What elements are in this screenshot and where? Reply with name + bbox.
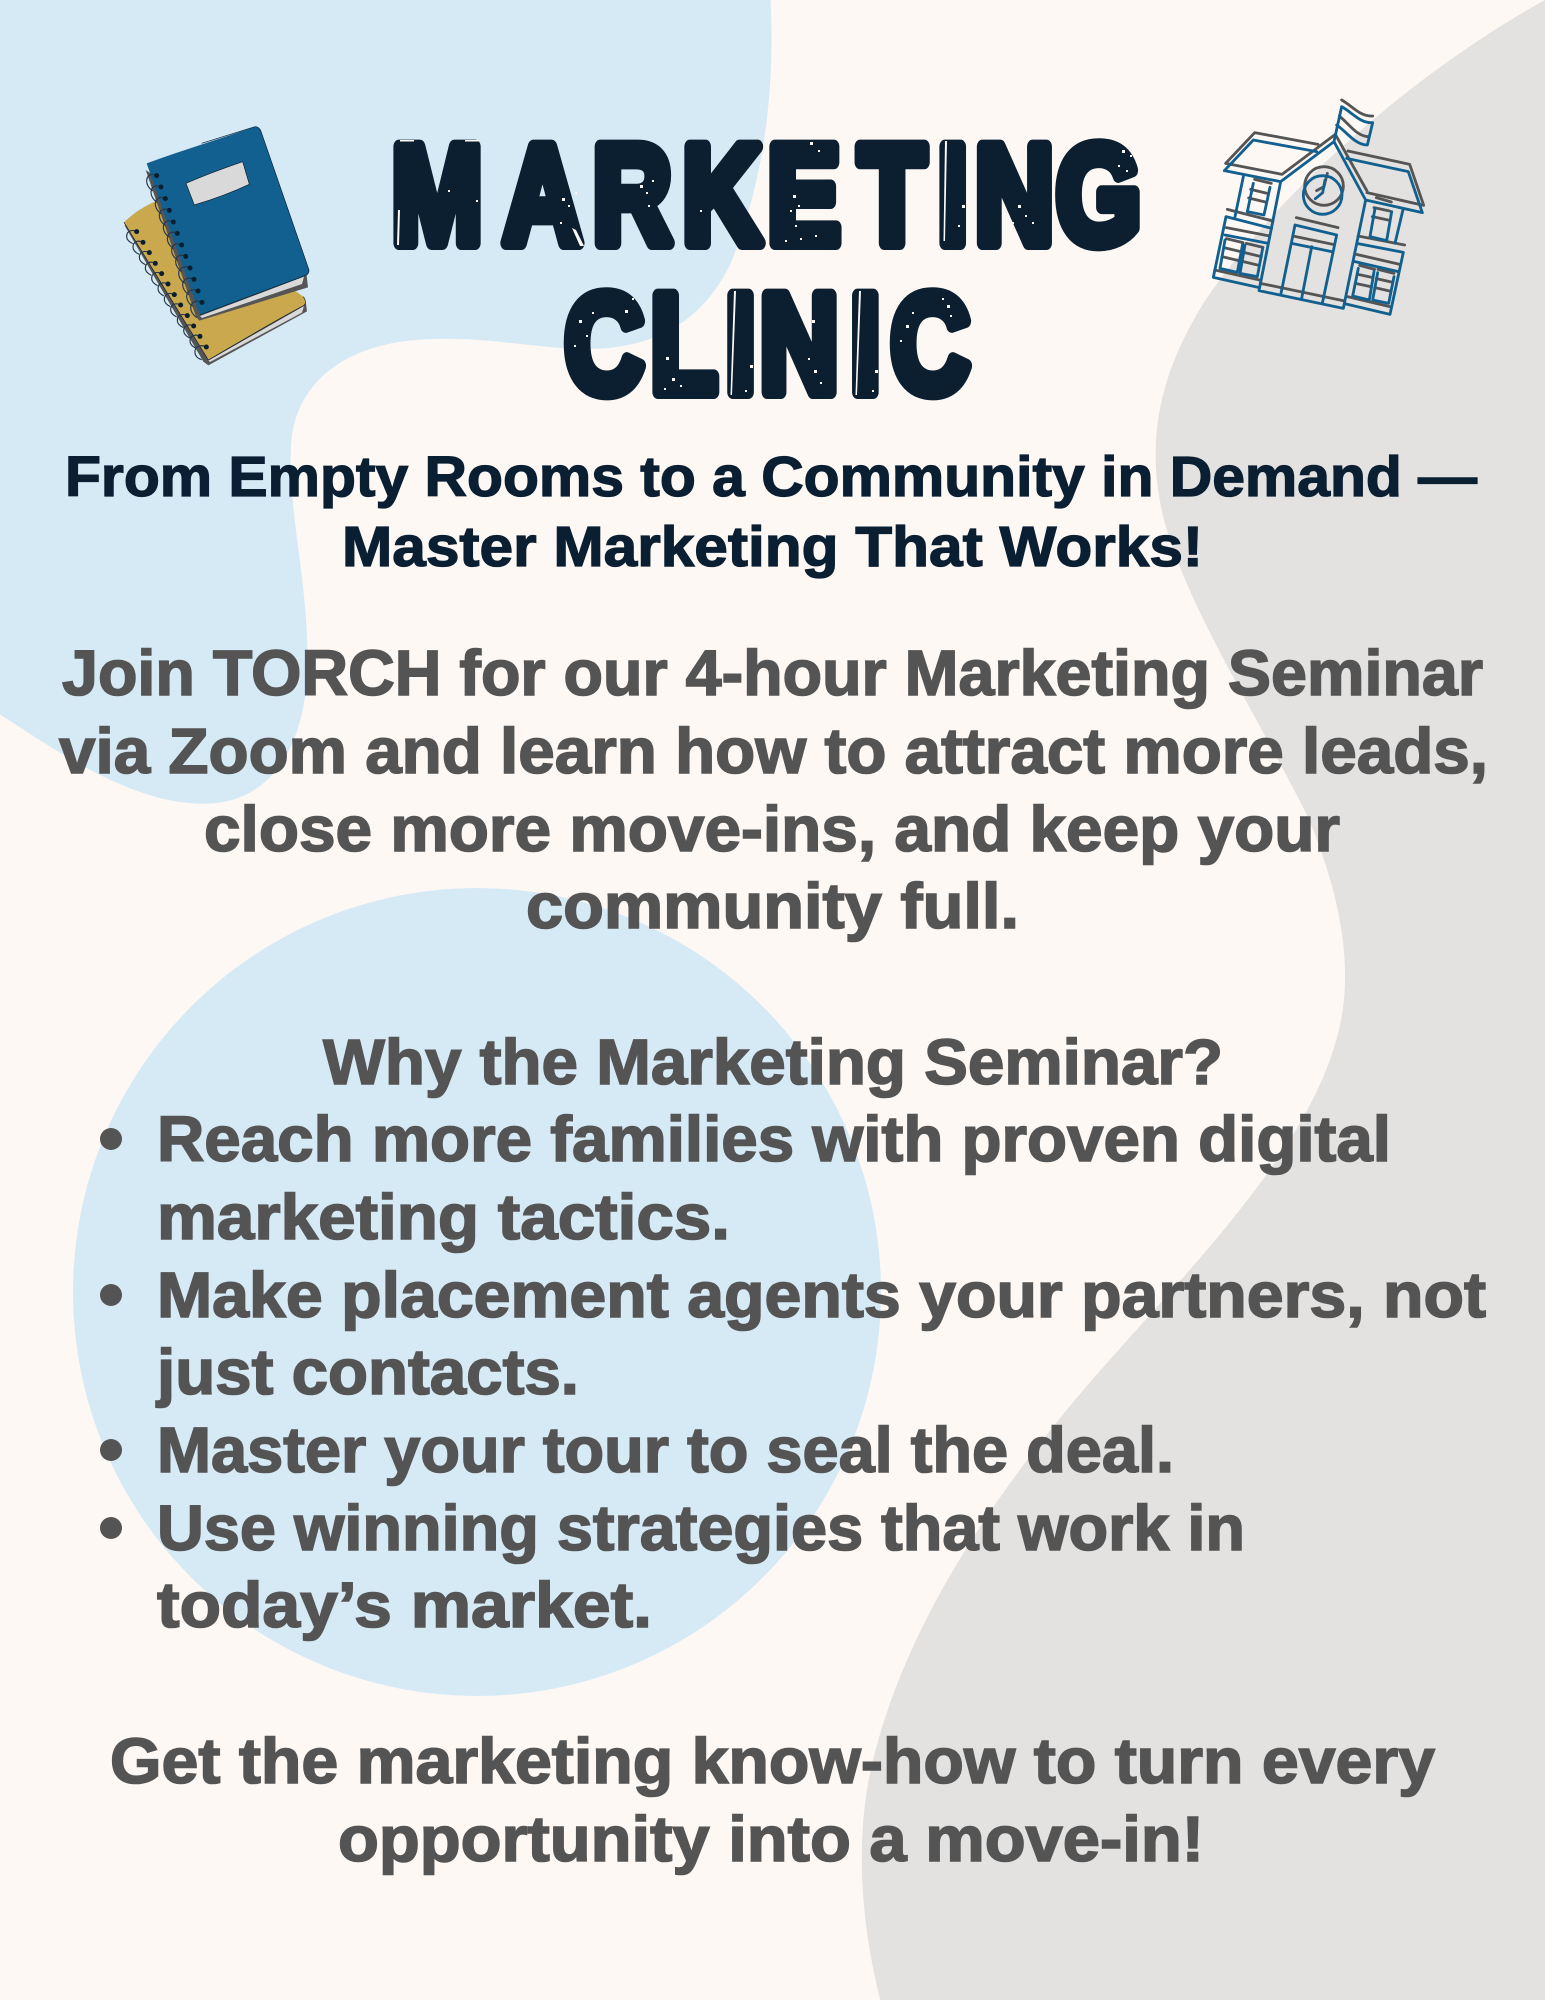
subtitle heading: Master Marketing That Works! [342, 515, 1203, 579]
bullet list: Use winning strategies that work in [157, 1492, 1245, 1564]
title [392, 116, 1141, 422]
title: MARKETING [392, 116, 1141, 273]
bullet list: Master your tour to seal the deal. [157, 1414, 1174, 1486]
school grey outline [1215, 100, 1424, 307]
icon: stacked notebooks [124, 127, 309, 365]
distressed texture on title letters [397, 140, 1132, 395]
closing call to action: opportunity into a move-in! [338, 1803, 1204, 1875]
intro paragraph: Join TORCH for our 4-hour Marketing Seminar [62, 637, 1483, 709]
section heading: why the seminar: Why the Marketing Seminar? [323, 1026, 1223, 1098]
bullet markers [100, 1128, 122, 1539]
intro paragraph: via Zoom and learn how to attract more leads, [59, 715, 1488, 787]
bullet list: Make placement agents your partners, not [157, 1259, 1486, 1331]
intro paragraph: close more move-ins, and keep your [204, 793, 1340, 865]
intro paragraph [59, 637, 1488, 942]
bullet list: just contacts. [156, 1336, 579, 1408]
subtitle heading [65, 445, 1477, 579]
background shape: blue circle [73, 888, 881, 1696]
gold notebook [124, 202, 307, 365]
title: CLINIC [565, 265, 970, 422]
icon: school building [1213, 100, 1424, 314]
bullet list: today’s market. [157, 1569, 652, 1641]
bullet list: Reach more families with proven digital [157, 1103, 1391, 1175]
intro paragraph: community full. [526, 870, 1019, 942]
bullet list [100, 1103, 1486, 1641]
background shape: blue blob top left [0, 0, 772, 804]
school blue outline [1213, 107, 1422, 314]
subtitle heading: From Empty Rooms to a Community in Demand — [65, 445, 1477, 509]
notebook label [186, 162, 249, 205]
background shape: grey wave [862, 0, 1545, 2000]
bullet list: marketing tactics. [157, 1181, 730, 1253]
blue notebook [146, 127, 309, 321]
closing call to action [110, 1725, 1435, 1875]
closing call to action: Get the marketing know-how to turn every [110, 1725, 1435, 1797]
school clock [1305, 167, 1343, 205]
